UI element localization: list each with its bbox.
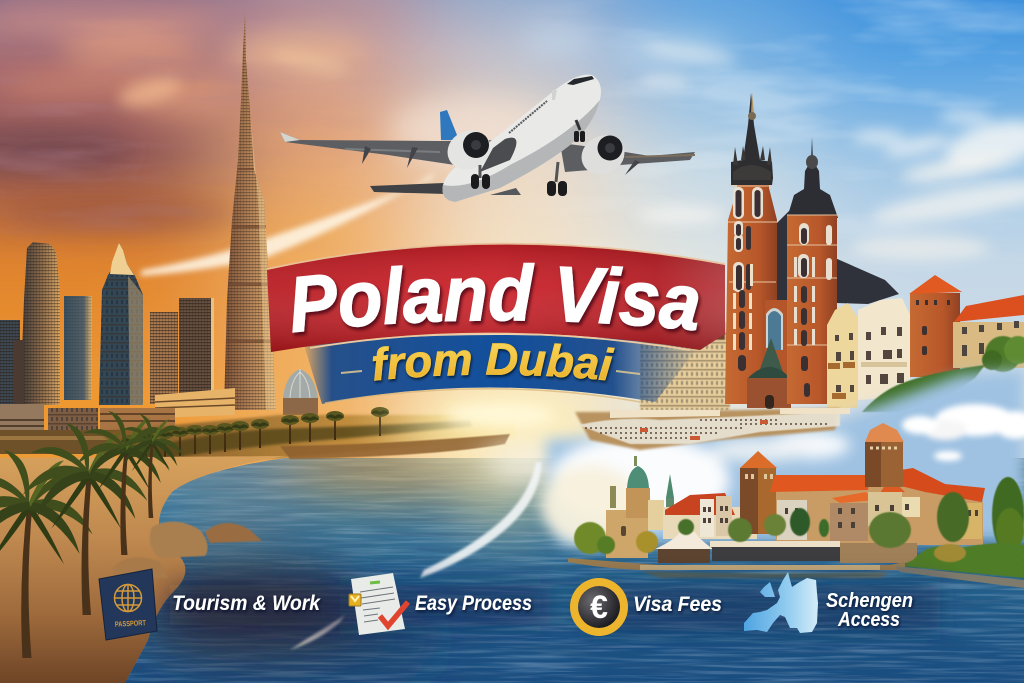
Dubai skyline — [0, 14, 515, 465]
basilica nave roof — [770, 210, 899, 304]
blue lower band — [304, 335, 700, 404]
dark band behind feature row — [170, 585, 940, 630]
label: Tourism & Work: Tourism & Work — [172, 592, 321, 615]
right engine — [575, 128, 631, 182]
feature: schengen access — [744, 572, 913, 633]
sunlight glow on water — [140, 395, 600, 670]
Burj Khalifa tower — [224, 14, 276, 410]
feature: visa fees — [570, 578, 722, 636]
main castle wing with red roofs — [770, 468, 985, 545]
label: Schengen: Schengen — [826, 590, 913, 612]
background town behind banner — [640, 316, 730, 410]
label: Access: Access — [837, 609, 900, 631]
heading: Poland Visa: Poland Visa — [292, 262, 702, 338]
cloudy sky over lower castle — [540, 370, 1024, 545]
crowd and market square — [575, 408, 850, 450]
tan building with red roof — [953, 295, 1024, 368]
decorative dashes beside subheading — [341, 371, 640, 374]
jet wake on water — [290, 462, 542, 650]
label: Easy Process: Easy Process — [415, 592, 532, 615]
right tower — [787, 137, 838, 404]
icon: passport: PASSPORT — [115, 618, 146, 629]
Krakow basilica and old town — [640, 92, 1024, 412]
feature: easy process — [349, 573, 532, 635]
icon: passport — [99, 569, 157, 640]
icon: euro coin: € — [590, 589, 608, 625]
left tower — [725, 92, 777, 404]
blue tail fin — [440, 110, 459, 140]
subheading: from Dubai: from Dubai — [372, 343, 617, 384]
upper round tower — [865, 423, 904, 487]
beach sand — [0, 456, 285, 683]
icon: euro coin — [570, 578, 628, 636]
green trees — [862, 336, 1024, 412]
feature: tourism and work — [99, 569, 321, 640]
icon: checklist document — [349, 573, 408, 635]
lower lakeside castle — [568, 423, 1024, 588]
fuselage — [442, 75, 601, 202]
icon: Europe map — [744, 572, 818, 633]
contrail — [140, 172, 436, 276]
far tailplane — [370, 183, 446, 194]
main portal and stained glass window — [747, 300, 791, 409]
right wing — [560, 143, 695, 172]
brick tower with orange roof — [909, 275, 962, 377]
left square tower — [740, 451, 777, 534]
left gabled houses — [663, 493, 757, 539]
shoreline and promenade — [568, 558, 1024, 588]
plane — [280, 75, 695, 202]
red and blue title banner — [267, 242, 726, 404]
dome building — [283, 369, 318, 415]
castle trees — [574, 477, 1024, 578]
left engine — [441, 123, 497, 177]
river water — [0, 440, 1024, 683]
low rise podium buildings — [0, 388, 235, 432]
large palm trees — [0, 411, 184, 658]
landing gear — [471, 120, 585, 196]
label: Visa Fees: Visa Fees — [633, 593, 722, 616]
downtown towers — [0, 242, 214, 405]
lakeside pavilion — [655, 532, 917, 563]
beach rocks — [112, 522, 262, 578]
left wing — [280, 132, 520, 165]
red upper band — [267, 244, 725, 352]
baroque church with green dome — [606, 456, 674, 558]
waterfront promenade trees — [0, 407, 515, 465]
cream tenement houses — [827, 298, 910, 408]
